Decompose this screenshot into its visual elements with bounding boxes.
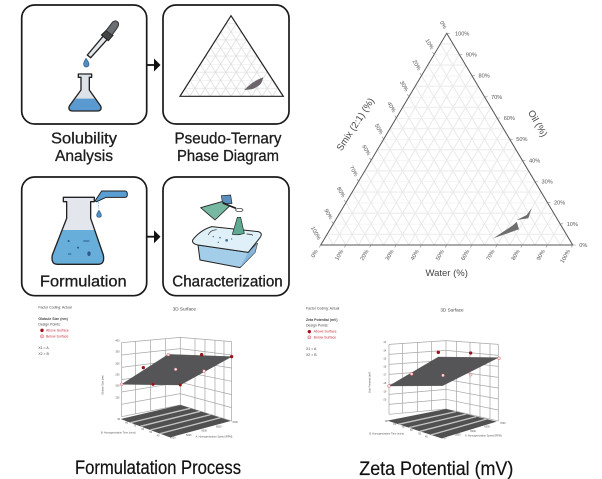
tick labels: -19 [383,390,387,393]
legend [306,306,340,357]
tick labels: 60 [410,429,413,432]
legend [38,305,72,356]
bottom axis tick labels: 100% [560,249,572,264]
legend: Below Surface [46,335,69,339]
bottom axis tick labels: 60% [460,249,471,262]
right axis tick labels: 90% [466,52,477,58]
right axis tick labels: 20% [554,200,565,206]
arrow: formulation to characterization [147,230,160,243]
right axis tick labels: 100% [455,32,469,38]
left axis tick labels: 10% [423,38,434,51]
axis labels: B: Homogenization Time (mins) [101,432,136,435]
right axis tick labels: 50% [516,137,528,143]
chart: globule size 3D surface: A: Homogenization Speed (RPM) [196,436,233,439]
icon: pouring spout [95,191,127,202]
tick labels: -20 [383,398,387,401]
tick labels: 250 [115,373,120,376]
icon: tray, cone and spoon [193,195,261,268]
bottom axis tick labels: 20% [360,249,370,262]
heading: Solubility Analysis: Solubility [51,130,117,147]
bottom axis tick labels [310,249,572,264]
phase region [493,208,532,238]
triangle with grid [321,33,573,245]
tick labels: 4000 [170,437,176,440]
card: Formulation [22,177,147,296]
tick labels: 60 [141,428,145,431]
tick labels: 70 [402,426,405,429]
left axis tick labels: 60% [360,144,371,157]
left axis tick labels: 100% [309,226,321,241]
tick labels: 40 [425,436,428,439]
arrow: solubility to phase diagram [147,58,160,72]
tick labels: -13 [383,341,387,344]
legend: Above Surface [46,329,69,333]
left axis tick labels: 80% [335,186,346,199]
tick labels: -14 [383,349,387,352]
legend: Design Points: [38,323,61,327]
tick labels [383,341,506,439]
tick labels: 90 [117,418,121,421]
left axis tick labels: 20% [411,59,421,72]
bottom axis tick labels: 30% [385,249,396,262]
floor contour [387,409,497,438]
label: Formulation: Formulation [40,274,127,291]
axis title: Smix: Smix (2:1) (%) [335,96,377,153]
tick labels: 300 [115,362,120,365]
heading: Pseudo-Ternary Phase Diagram [174,130,282,165]
heading: Solubility Analysis: Analysis [55,148,113,165]
tick labels: -15 [383,357,387,360]
tick labels: 6500 [484,426,490,429]
left axis tick labels [309,20,447,241]
right axis tick labels: 70% [491,95,502,101]
tick labels: -16 [383,366,387,369]
icon: flask with blue liquid [69,74,101,111]
legend: X1 = A [306,347,317,351]
tick labels: 90 [385,420,388,423]
tick labels: 80 [125,422,129,425]
card: Characterization [163,177,289,296]
tick marks [319,33,576,247]
left axis tick labels: 90% [322,208,333,221]
legend: X2 = B [38,352,50,356]
tick labels: 350 [115,351,120,354]
heading: Pseudo-Ternary Phase Diagram: Phase Diagram [177,148,279,165]
floor contour [121,405,231,437]
legend: X1 = A [38,346,49,350]
legend: Globule Size (nm) [38,317,68,321]
right axis tick labels: 0% [579,243,587,249]
icon: dropper [84,21,119,67]
icon: large flask [52,191,127,264]
card: Solubility Analysis [22,5,147,124]
label: Characterization: Characterization [172,274,283,291]
tick labels: 400 [115,339,120,342]
chart: zeta potential 3D surface: A: Homogenization Speed (RPM) [465,435,502,438]
chart: large ternary phase diagram [309,20,587,279]
legend: X2 = B [306,353,317,357]
right axis tick labels: 30% [542,180,553,186]
chart title: 3D Surface [440,308,464,313]
tick labels: -18 [383,382,387,385]
tick labels: -17 [383,374,387,377]
left axis tick labels: 70% [348,165,358,178]
legend: Design Points: [306,324,328,328]
tick labels: 5000 [186,434,192,437]
left axis tick labels: 30% [398,80,409,93]
walls [122,337,232,421]
bottom axis tick labels: 50% [435,249,446,262]
legend: Factor Coding: Actual [306,306,340,310]
tick labels: 5000 [455,434,461,437]
bottom axis tick labels: 80% [511,249,522,262]
tick labels: 150 [115,396,120,399]
legend: Below Surface [314,336,336,340]
tick labels: 80 [393,423,397,426]
chart: zeta potential 3D surface: Zeta Potential (mV) [368,371,371,393]
caption: Formulatation Process: Formulatation Process [75,458,241,479]
tick labels: 70 [133,425,137,428]
right axis tick labels: 60% [504,116,515,122]
chart: globule size 3D surface: Globule Size (nm) [101,375,104,395]
tick labels: 6000 [470,430,476,433]
tick labels: 40 [157,435,160,438]
chart: globule size 3D surface [38,305,238,440]
small phase region [244,77,263,90]
tick labels: 4000 [441,436,447,439]
right axis tick labels: 80% [478,74,490,80]
left axis tick labels: 40% [385,101,396,114]
surface [122,354,232,385]
left axis tick labels: 0% [438,20,447,30]
tick labels: 50 [149,431,153,434]
design points [120,353,233,386]
bottom axis tick labels: 40% [410,249,421,262]
tick labels: 6000 [201,430,207,433]
surface [389,357,498,386]
bottom axis tick labels: 0% [310,249,320,259]
tick labels: 6500 [216,425,222,428]
axis labels: B: Homogenization Time (mins) [369,433,404,436]
right axis tick labels: 40% [529,158,540,164]
small ternary diagram [180,16,283,96]
walls [389,341,498,421]
legend: Factor Coding: Actual [38,305,72,309]
legend: Above Surface [314,330,337,334]
bottom axis tick labels: 10% [334,249,345,262]
tick labels [115,339,238,440]
axis title: Water: Water (%) [425,268,468,279]
design points [387,351,500,387]
tick labels: 200 [115,385,120,388]
chart title: 3D Surface [173,307,196,312]
tick labels: 50 [418,432,422,435]
tick labels: 7000 [232,421,238,424]
heading: Solubility Analysis [51,130,117,165]
axis title: Oil: Oil (%) [525,108,549,139]
right axis tick labels: 10% [567,222,578,228]
legend: Zeta Potential (mV) [306,318,338,322]
chart: zeta potential 3D surface [306,306,506,439]
bottom axis tick labels: 70% [486,249,496,262]
right axis tick labels [455,32,587,249]
heading: Pseudo-Ternary Phase Diagram: Pseudo-Ternary [174,130,282,147]
left axis tick labels: 50% [373,123,384,136]
bottom axis tick labels: 90% [536,249,547,262]
card: Pseudo-Ternary Phase Diagram [163,5,289,124]
tick labels: 7000 [500,422,506,425]
